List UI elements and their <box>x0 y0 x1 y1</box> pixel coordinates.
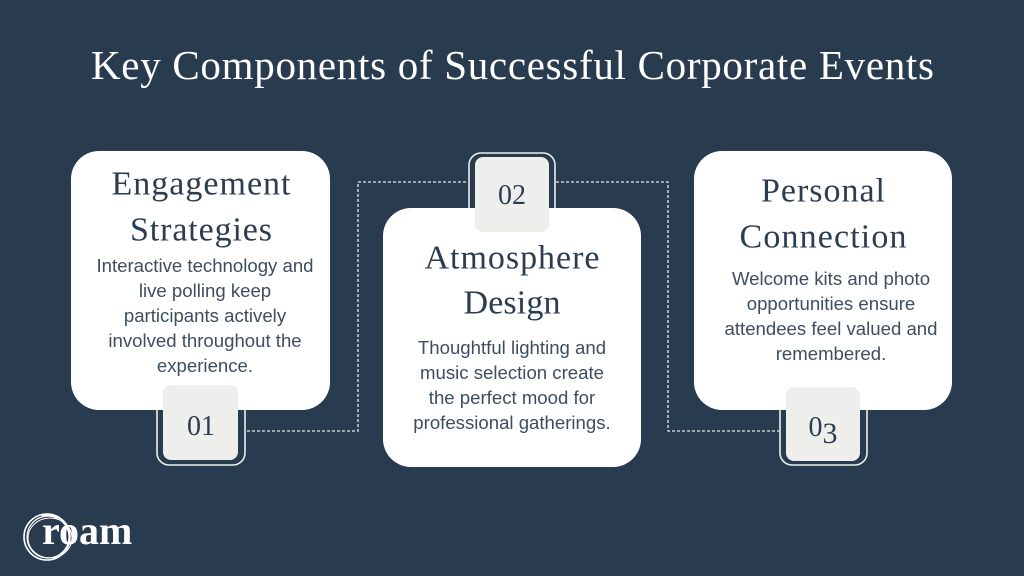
body text 02: professional gatherings. <box>413 412 611 433</box>
icon: logo rings <box>24 514 72 560</box>
body text 02: music selection create <box>420 362 604 383</box>
number badge 03 <box>786 387 860 461</box>
number badge 01: 01 <box>187 411 215 442</box>
card 01 <box>71 151 330 410</box>
card 02 <box>383 208 641 467</box>
body text 01: Interactive technology and <box>96 255 314 276</box>
body text 01: experience. <box>157 355 253 376</box>
number badge 02 <box>475 157 549 232</box>
card 03 <box>694 151 952 410</box>
panel: atmosphere design <box>383 153 641 467</box>
panel: personal connection <box>694 151 952 465</box>
logo: roam <box>24 508 132 560</box>
dashed connector: step 02 to step 03 <box>556 182 779 431</box>
body text 01: participants actively <box>124 305 287 326</box>
badge outline 02 <box>469 153 555 212</box>
number badge 01 <box>163 385 238 460</box>
heading 03: Personal <box>761 172 885 210</box>
body text 03: opportunities ensure <box>747 293 915 314</box>
title: Key Components of Successful Corporate Events <box>91 42 934 88</box>
panel: engagement strategies <box>71 151 330 465</box>
logo wordmark: roam <box>42 508 132 553</box>
body text 03: attendees feel valued and <box>725 318 937 339</box>
body text 02: the perfect mood for <box>429 387 595 408</box>
body text 03: remembered. <box>776 343 886 364</box>
heading 03 second line: Connection <box>740 218 906 256</box>
number badge 02: 02 <box>498 180 526 211</box>
number badge 03: 3 <box>822 417 838 450</box>
heading 02: Atmosphere <box>424 240 600 276</box>
badge outline 01 <box>157 405 245 465</box>
body text 02: Thoughtful lighting and <box>418 337 606 358</box>
body text 02 <box>413 337 611 433</box>
heading 01: Engagement <box>112 166 291 202</box>
number badge 03: 0 <box>808 412 822 443</box>
body text 01 <box>96 255 314 376</box>
body text 03: Welcome kits and photo <box>732 268 930 289</box>
body text 03 <box>725 268 937 364</box>
badge outline 03 <box>780 405 867 465</box>
heading 02 second line: Design <box>464 284 560 322</box>
body text 01: involved throughout the <box>108 330 302 351</box>
heading 01 second line: Strategies <box>130 212 272 248</box>
body text 01: live polling keep <box>139 280 271 301</box>
dashed connector: step 01 to step 02 <box>247 182 468 431</box>
